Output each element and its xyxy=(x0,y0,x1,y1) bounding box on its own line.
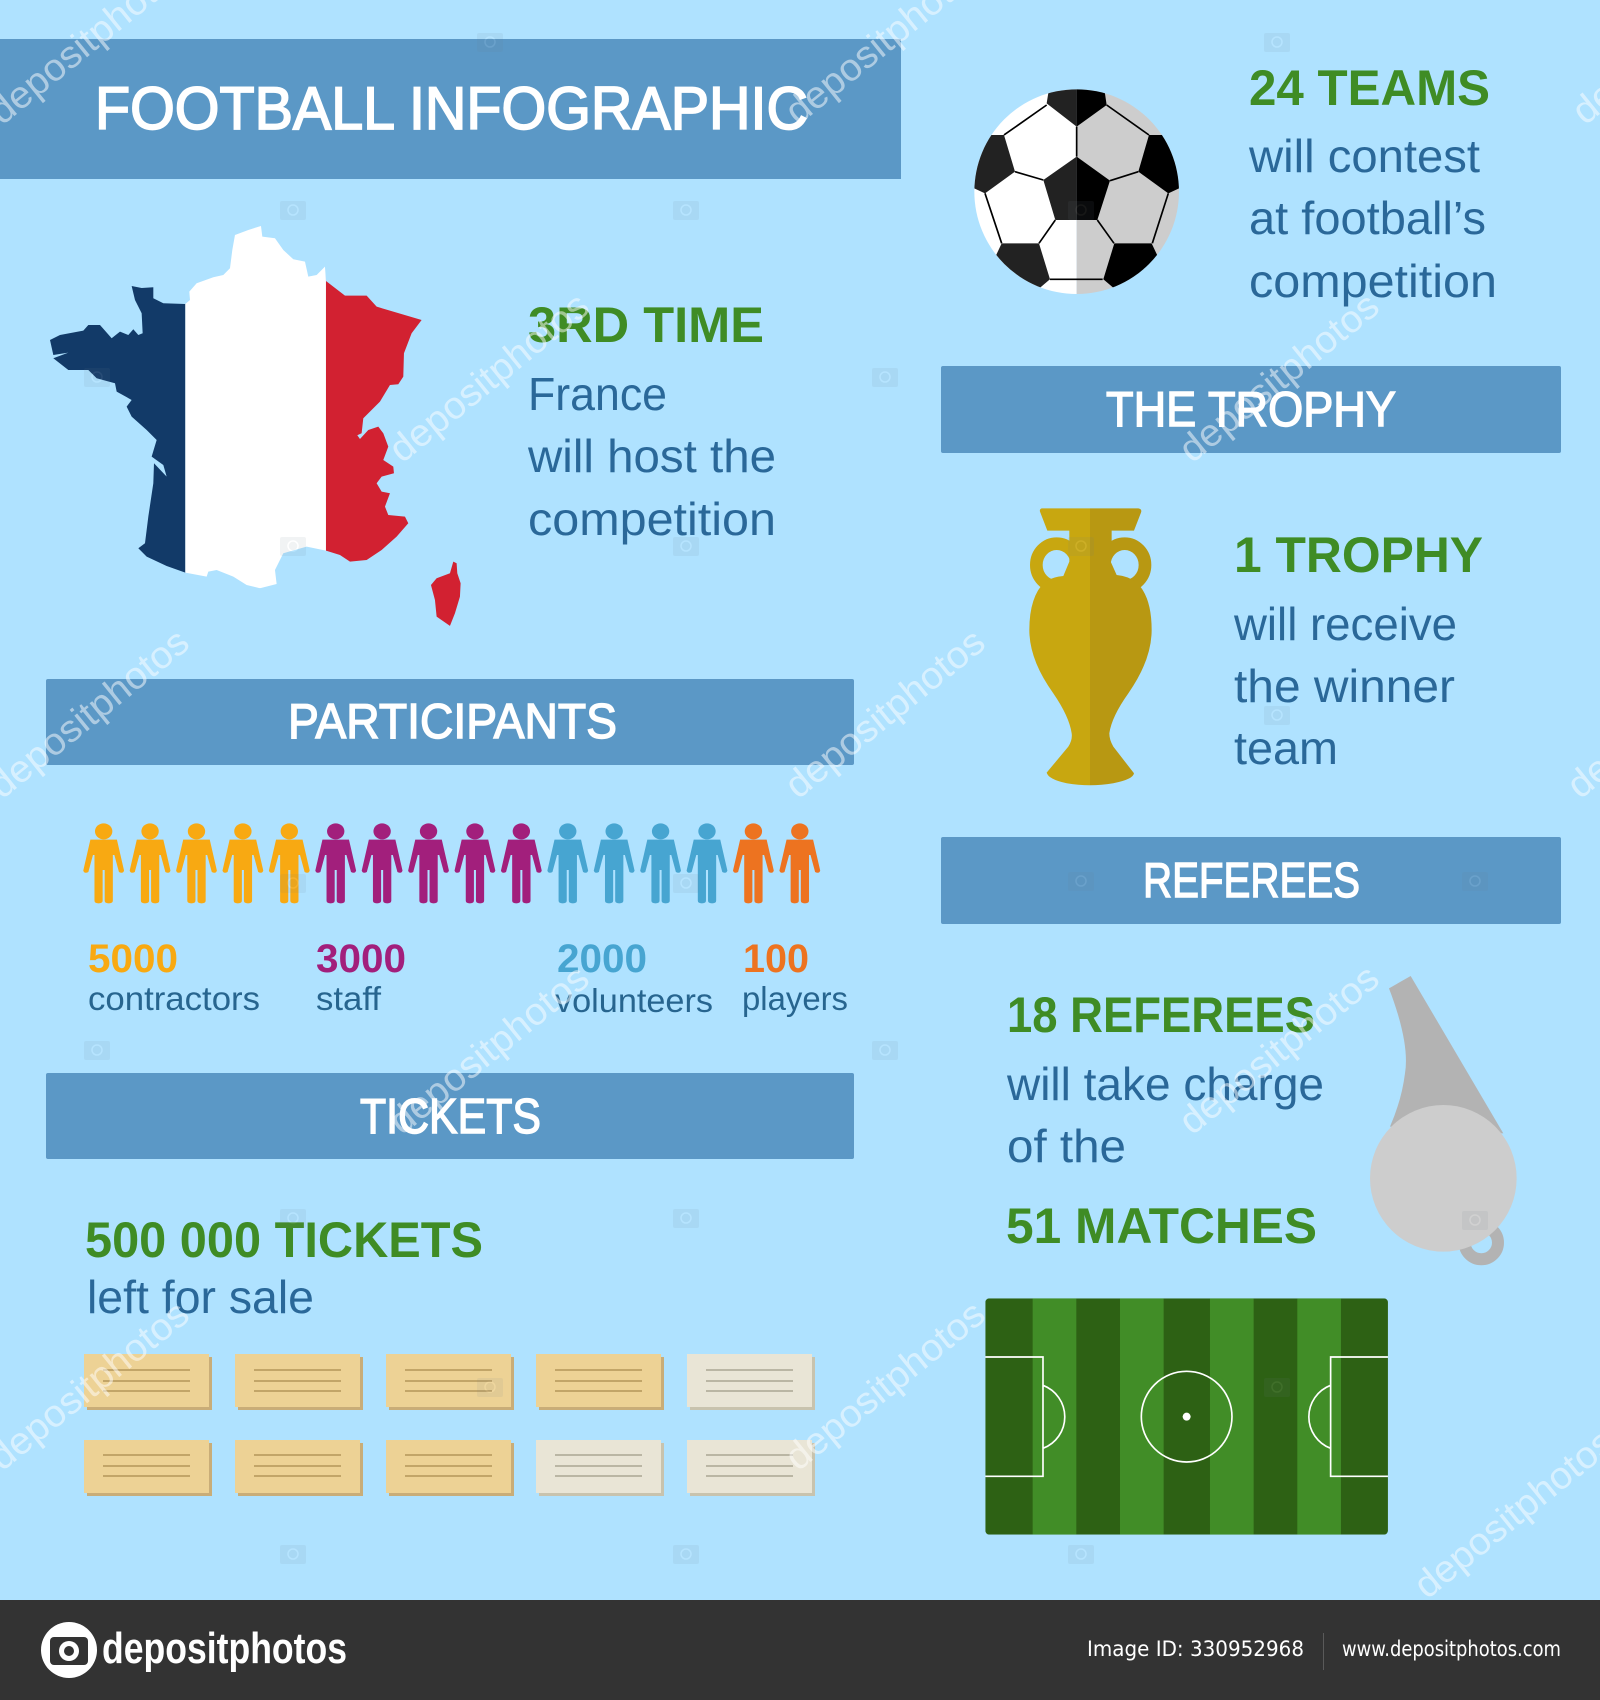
heading: referees: REFEREES xyxy=(1143,854,1360,908)
heading: participants: PARTICIPANTS xyxy=(288,695,617,749)
stat: players: 100 xyxy=(743,937,809,981)
text: 24 teams: 24 TEAMS xyxy=(1249,60,1490,116)
text: France hosts xyxy=(527,297,776,545)
stat: contractors: 5000 xyxy=(88,937,178,981)
text: 1 trophy: team xyxy=(1234,722,1338,774)
text: referees and matches: of the xyxy=(1007,1120,1126,1172)
watermark layer: depositphotos xyxy=(381,285,597,471)
watermark layer: depositphotos xyxy=(777,621,993,807)
stat: contractors xyxy=(88,937,260,1017)
text: 1 trophy: will receive xyxy=(1233,598,1457,650)
heading: referees xyxy=(941,837,1561,924)
tickets grid xyxy=(84,1354,815,1496)
icon: France map in tricolour xyxy=(33,217,461,626)
people: staff xyxy=(315,823,542,903)
text: 24 teams: at football’s xyxy=(1249,192,1486,244)
text: tickets left: left for sale xyxy=(87,1271,314,1323)
heading: the trophy: THE TROPHY xyxy=(1106,383,1396,437)
watermark layer: depositphotos xyxy=(1171,285,1387,471)
text: France hosts: will host the xyxy=(527,430,776,482)
heading: the trophy xyxy=(941,366,1561,453)
watermark layer: depositphotos xyxy=(1171,957,1387,1143)
icon: depositphotos logo xyxy=(41,1622,97,1678)
heading: tickets: TICKETS xyxy=(360,1090,541,1144)
text: 1 trophy: the winner xyxy=(1234,660,1455,712)
stat: contractors: contractors xyxy=(88,980,260,1017)
people: contractors xyxy=(83,823,310,903)
text: 1 trophy: 1 TROPHY xyxy=(1234,527,1483,583)
stat: volunteers xyxy=(555,937,713,1019)
footer bar xyxy=(0,1600,1600,1700)
stat: staff: 3000 xyxy=(316,937,406,981)
pictogram row: participants xyxy=(83,823,820,903)
text: France hosts: France xyxy=(528,368,667,420)
people: players xyxy=(733,823,820,903)
text: 24 teams xyxy=(1248,60,1497,307)
text: France hosts: 3RD TIME xyxy=(528,297,764,353)
title banner xyxy=(0,39,901,179)
text: referees and matches: 18 REFEREES xyxy=(1007,987,1315,1043)
icon: football xyxy=(974,89,1179,294)
stat: volunteers: 2000 xyxy=(557,937,647,981)
icon: trophy xyxy=(1029,508,1152,785)
icon: football pitch xyxy=(980,1298,1393,1535)
stat: players: players xyxy=(742,980,848,1017)
stat: staff: staff xyxy=(316,980,382,1017)
stat: volunteers: volunteers xyxy=(555,982,713,1019)
text: tickets left: 500 000 TICKETS xyxy=(85,1212,483,1268)
stat: staff xyxy=(316,937,406,1017)
watermark layer: depositphotos xyxy=(777,1293,993,1479)
footer brand name: depositphotos xyxy=(102,1624,347,1673)
text: 24 teams: will contest xyxy=(1248,130,1480,182)
footer website: www.depositphotos.com xyxy=(1342,1637,1561,1661)
heading: participants xyxy=(46,679,854,765)
text: referees and matches: 51 MATCHES xyxy=(1006,1198,1317,1254)
icon: whistle xyxy=(1370,976,1517,1259)
text: 24 teams: competition xyxy=(1249,255,1497,307)
text: tickets left xyxy=(85,1212,483,1323)
footer image id: Image ID: 330952968 xyxy=(1087,1637,1304,1661)
stat: players xyxy=(742,937,848,1017)
text: referees and matches: will take charge xyxy=(1006,1058,1324,1110)
people: volunteers xyxy=(547,823,727,903)
text: France hosts: competition xyxy=(528,493,776,545)
text: referees and matches xyxy=(1006,987,1324,1254)
heading: tickets xyxy=(46,1073,854,1159)
watermark layer: depositphotos xyxy=(381,957,597,1143)
text: 1 trophy xyxy=(1233,527,1483,774)
title banner: FOOTBALL INFOGRAPHIC xyxy=(95,75,808,142)
